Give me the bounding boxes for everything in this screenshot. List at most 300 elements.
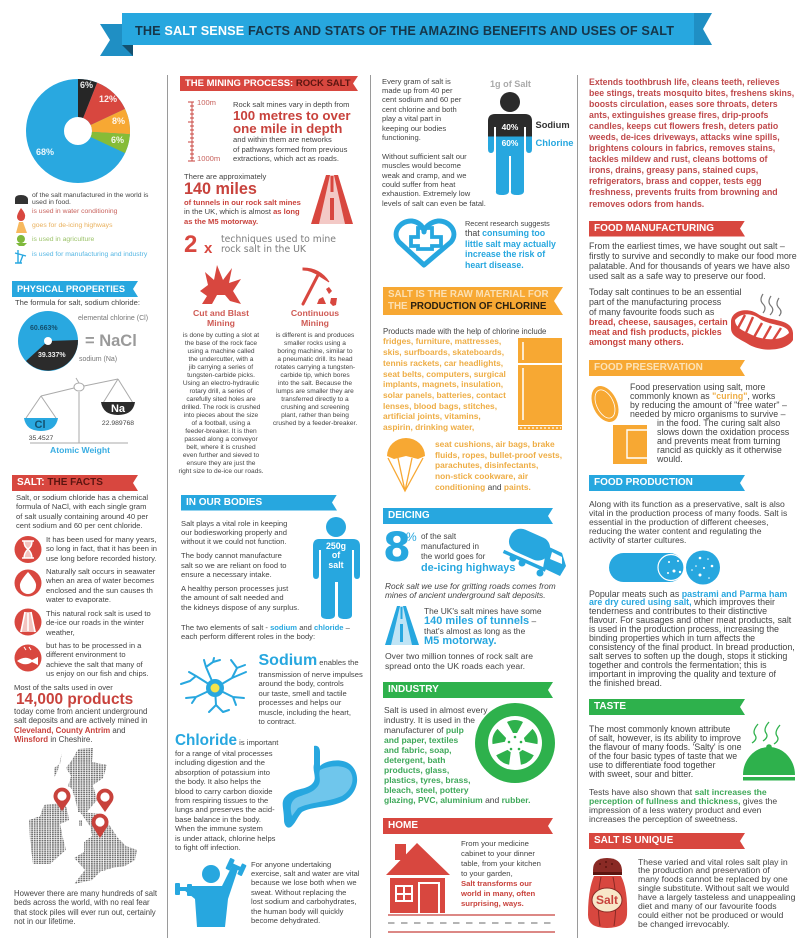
- text: mine depth: and within them are networks: [233, 135, 332, 144]
- text: cut and blast description: rotary drill, a series of: [189, 388, 253, 395]
- text: more chlorine products: parachutes, disinfectants,: [435, 460, 538, 470]
- text: industry uses: and fabric, soap,: [384, 745, 452, 755]
- text: fact list two: [46, 567, 156, 604]
- text: uk salt mines: The UK's salt mines have some: [424, 606, 542, 616]
- text: household uses: removes odors from hands.: [589, 199, 704, 209]
- text: 140 miles of tunnels: [184, 172, 301, 226]
- text: salt is unique: single substitute. Without salt we would: [638, 883, 789, 893]
- text: heart disease research: [465, 218, 565, 270]
- text: cut and blast description: ensure they are just the: [187, 460, 255, 467]
- text: meats: consistency of the final product. In bread production,: [589, 642, 795, 652]
- chart: sodium chloride composition pie: [18, 311, 78, 371]
- text: uk salt mines: M5 motorway.: [424, 635, 497, 647]
- heading: food preservation: FOOD PRESERVATION: [594, 362, 703, 373]
- text: exercise: because we lose both when we: [251, 878, 357, 887]
- text: household uses: candles, keeps cut flowers fresh, deters patio: [589, 121, 778, 131]
- text: salt is unique: [638, 858, 795, 929]
- illustration: atomic weight scale: 35.4527: [29, 435, 53, 442]
- text: fact list three: This natural rock salt is used to: [46, 609, 151, 618]
- text: bodies intro: [181, 518, 299, 612]
- text: sodium: around the body, controls: [258, 679, 344, 688]
- heading: salt is unique: SALT IS UNIQUE: [594, 835, 673, 846]
- text: heart disease research: increase the risk of: [465, 249, 545, 259]
- text: meats: the finished bread.: [589, 678, 662, 688]
- text: household uses: bee stings, treats mosquito bites, freshens skins,: [589, 88, 794, 98]
- text: continuous mining description: smaller rocks using a: [284, 340, 346, 347]
- legend: pie chart key: [14, 192, 148, 264]
- icon: road: [14, 608, 42, 636]
- icon: depth ruler: [188, 102, 195, 162]
- text: household uses: irons, drains, greasy pans, stained cups,: [589, 165, 758, 175]
- icon: stomach: [282, 746, 358, 828]
- text: salt is unique: the production and preservation of: [638, 865, 770, 875]
- text: chlorine products: fridges, furniture, mattresses,: [383, 336, 501, 346]
- text: food manufacturing: firstly to survive and secondly to make our food more: [589, 251, 797, 261]
- text: cut and blast description: carefully sited holes are: [186, 396, 256, 403]
- text: household uses: [589, 76, 794, 210]
- text: 140 miles of tunnels: 140 miles: [184, 180, 257, 198]
- text: food production: essential in the production of different cheeses,: [589, 516, 768, 526]
- text: 8 percent: of the salt: [421, 532, 456, 541]
- text: food manufacturing: of many favourite foods such as: [589, 307, 714, 317]
- text: fact list one: It has been used for many years,: [46, 535, 157, 544]
- text: continuous mining description: [273, 332, 357, 427]
- text: cut and blast description: is done by cutting a slot at: [183, 332, 259, 339]
- text: home: table, from your kitchen: [461, 859, 541, 868]
- text: industry uses: industry. It is used in the: [384, 715, 475, 725]
- text: fact list two: Naturally salt occurs in seawater: [46, 567, 155, 576]
- text: 1g of salt: 1g of Salt: [490, 79, 531, 89]
- text: home: to your garden,: [461, 869, 513, 878]
- heading: in our bodies: IN OUR BODIES: [186, 496, 262, 508]
- text: meats: together and controls the fermentation; this is: [589, 660, 767, 670]
- text: every gram: cent sodium and 60 per: [382, 95, 461, 104]
- text: taste: use to differentiate food together: [589, 760, 716, 770]
- text: more chlorine products: seat cushions, air bags, brake: [435, 439, 555, 449]
- text: salt beds closing: that stock piles will ever run out, certainly: [14, 908, 156, 917]
- text: home: From your medicine: [461, 839, 529, 848]
- chart: salt usage pie: 12%: [99, 94, 117, 104]
- heading: deicing: DEICING: [388, 510, 430, 521]
- text: chlorine products: solar panels, batteries, contact: [383, 390, 506, 400]
- chart: salt usage pie: 8%: [112, 116, 125, 126]
- text: bodies intro: our bodiesworking properly and: [181, 528, 287, 537]
- text: food manufacturing: part of the manufacturing process: [589, 297, 721, 307]
- text: food preservation: [630, 383, 810, 465]
- text: bodies intro: the kidneys dispose of any surplus.: [181, 603, 299, 612]
- text: more chlorine products: fluids, ropes, bullet-proof vests,: [435, 450, 562, 460]
- illustration: atomic weight scale: Atomic Weight: [50, 445, 110, 455]
- icon: weightlifter: [175, 858, 246, 927]
- text: exercise: become dehydrated.: [251, 916, 320, 925]
- icon: steak: [730, 293, 794, 351]
- text: household uses: freshness, prevents fruits from browning and: [589, 187, 778, 197]
- text: sodium label: sodium (Na): [79, 356, 117, 363]
- text: continuous mining description: boring machine, similar to: [277, 348, 353, 355]
- text: chloride: to fight off infection.: [175, 843, 241, 852]
- text: every gram: weak and cramp, and we: [382, 171, 466, 180]
- chart: salt usage pie: [26, 79, 130, 183]
- illustration: atomic weight scale: [24, 378, 135, 455]
- text: continuous mining description: is different is and produces: [276, 332, 354, 339]
- text: continuous mining description: lumps are smaller they are: [276, 388, 354, 395]
- heading: salt is unique: [589, 833, 745, 849]
- text: exercise: sweat. Without replacing the: [251, 888, 346, 897]
- icon: person with 250g of salt: [313, 517, 360, 619]
- text: cut and blast description: even further and sieved to: [183, 452, 259, 459]
- text: 140 miles of tunnels: as the M5 motorway.: [184, 217, 258, 226]
- icon: person with 250g of salt: salt: [328, 560, 344, 570]
- heading: physical properties: [12, 281, 138, 297]
- icon: serving cloche: [743, 722, 795, 782]
- text: fact list two: water to evaporate.: [46, 595, 111, 604]
- text: two million tonnes: spread onto the UK roads each year.: [385, 661, 525, 671]
- heading: food manufacturing: [589, 220, 745, 236]
- text: chloride: for a range of vital processes: [175, 749, 273, 758]
- text: two techniques: techniques used to mine: [221, 234, 336, 245]
- text: industry uses: detergent, bath: [384, 755, 445, 765]
- heading: continuous mining: Mining: [301, 318, 329, 328]
- icon: salt shaker: Salt: [596, 893, 618, 907]
- text: depth labels: 1000m: [197, 154, 220, 163]
- text: NaCl formula: = NaCl: [85, 332, 137, 350]
- text: more chlorine products: conditioning and paints.: [435, 482, 531, 492]
- heading: physical properties: PHYSICAL PROPERTIES: [17, 284, 125, 294]
- icon: pickaxe and rocks: [301, 268, 337, 306]
- text: industry uses: manufacturer of pulp: [384, 725, 464, 735]
- text: rock salt gritting: mines of ancient underground salt deposits.: [385, 590, 546, 600]
- text: 140 miles of tunnels: There are approximately: [184, 172, 266, 181]
- heading: raw material for chlorine: THE PRODUCTION OF CHLORINE: [388, 301, 546, 312]
- heading: salt the facts: [12, 475, 138, 491]
- text: heart disease research: that consuming too: [465, 228, 545, 238]
- heading: cut and blast mining: [193, 308, 249, 328]
- text: cut and blast description: drilled. The rock is crushed: [182, 404, 260, 411]
- heading: mining process: [180, 76, 358, 91]
- text: salt beds closing: However there are many hundreds of salt: [14, 889, 157, 898]
- text: meats: is used in the production process, increasing the: [589, 624, 779, 634]
- illustration: atomic weight scale: Cl: [34, 419, 46, 431]
- text: fact list one: use long before recorded history.: [46, 554, 156, 563]
- text: food preservation: slows down the oxidation process: [657, 427, 789, 437]
- chart: salt usage pie: 6%: [111, 135, 124, 145]
- text: two techniques: x: [204, 240, 212, 257]
- heading: industry: [383, 682, 553, 698]
- icon: neuron: [180, 657, 247, 713]
- text: chloride: blood to carry carbon dioxide: [175, 787, 273, 796]
- heading: in our bodies: [181, 494, 337, 510]
- text: chloride: from respiring tissues to the: [175, 796, 268, 805]
- text: household uses: ants, extinguishes grease fires, drip-proofs: [589, 110, 768, 120]
- text: home: Salt transforms our: [461, 879, 532, 888]
- text: 14,000 products: Winsford in Cheshire.: [14, 735, 92, 744]
- map: UK salt mines: [29, 748, 137, 884]
- text: chloride: absorption of potassium into: [175, 768, 270, 777]
- text: food manufacturing: [589, 241, 797, 347]
- icon: parachute: [387, 438, 425, 493]
- legend: pie chart key: goes for de-icing highways: [32, 222, 112, 229]
- text: fact list one: so long in fact, that it has been in: [46, 544, 157, 553]
- chart: sodium chloride composition pie: 60.663%: [30, 325, 58, 332]
- heading: deicing: [383, 508, 553, 524]
- text: every gram: functioning. Without sufficient salt our: [382, 133, 467, 161]
- text: chlorine products: skis, surfboards, skateboards,: [383, 347, 504, 357]
- text: two million tonnes: Over two million tonnes of rock salt are: [385, 651, 533, 661]
- text: food production: Along with its function as a preservative, salt is also: [589, 498, 785, 508]
- text: fact list three: de-ice our roads in the winter: [46, 618, 144, 627]
- text: chloride: When the immune system: [175, 824, 263, 833]
- text: chloride: is under attack, chlorine helps: [175, 834, 275, 843]
- title banner: [100, 13, 712, 56]
- text: salt is unique: These varied and vital roles salt play in: [638, 856, 788, 866]
- icon: hourglass: [14, 536, 42, 563]
- text: continuous mining description: rotates carrying a tungsten-: [275, 364, 355, 371]
- text: home: surprising, ways.: [461, 899, 524, 908]
- text: taste: impression of a less watery product and even: [589, 804, 761, 814]
- text: every gram: could suffer from heat: [382, 180, 455, 189]
- text: industry uses: [384, 705, 530, 805]
- text: bodies intro: salt so we are reliant on food to: [181, 561, 287, 570]
- heading: continuous mining: [291, 308, 339, 328]
- legend: pie chart key: used in food.: [32, 199, 71, 206]
- text: household uses: tackles mildew and rust, cleans bottoms of: [589, 154, 767, 164]
- text: cut and blast description: right size to de-ice our roads.: [178, 468, 264, 475]
- text: sodium: processes and helps our: [258, 698, 341, 707]
- text: taste: [589, 724, 777, 824]
- text: every gram: exhaustion. Extremely low: [382, 189, 470, 198]
- icon: explosion: [200, 265, 241, 304]
- text: fact list four: different environment to: [46, 650, 126, 659]
- legend: pie chart key: is used in agriculture: [32, 236, 94, 243]
- text: chlorine products: [383, 326, 513, 433]
- illustration: road lines: [388, 914, 556, 934]
- text: 14,000 products: [14, 683, 147, 744]
- text: exercise: the human body will quickly: [251, 907, 343, 916]
- text: two elements: [181, 623, 350, 641]
- text: taste: The most commonly known attribute: [589, 724, 730, 734]
- text: food manufacturing: bread, cheese, sausages, certain: [589, 317, 728, 327]
- text: sodium: to contract.: [258, 717, 296, 726]
- text: salt intro: [16, 493, 148, 530]
- legend: pie chart key: is used for manufacturing and industry: [32, 251, 147, 258]
- text: fact list four: us enjoy on our fish and chips.: [46, 669, 149, 678]
- text: chlorine products: implants, magnets, insulation,: [383, 379, 503, 389]
- text: chlorine products: aspirin, drinking water,: [383, 422, 474, 432]
- text: food manufacturing: palatable. And for thousands of years we have also: [589, 261, 790, 271]
- text: industry uses: Salt is used in almost every: [384, 705, 487, 715]
- text: chloride: the body. It also helps the: [175, 777, 261, 786]
- icon: salt shaker: [588, 857, 627, 928]
- text: food preservation: needed by micro organisms to survive –: [630, 409, 785, 419]
- text: 14,000 products: today come from ancient underground: [14, 707, 147, 716]
- text: food preservation: in the food. The curing salt also: [657, 418, 780, 428]
- text: every gram: keeping our bodies: [382, 124, 446, 133]
- text: chlorine products: seat belts, computers, surgical: [383, 369, 506, 379]
- heading: home: HOME: [388, 820, 418, 831]
- text: every gram: play a vital part in: [382, 114, 441, 123]
- illustration: atomic weight scale: 22.989768: [102, 420, 134, 427]
- text: heart disease research: little salt may actually: [465, 238, 556, 248]
- text: two elements: each perform different roles in the body:: [181, 632, 315, 641]
- text: 14,000 products: Cleveland, County Antrim and: [14, 726, 126, 735]
- title banner: THE SALT SENSE FACTS AND STATS OF THE AMAZING BENEFITS AND USES OF SALT: [135, 24, 674, 38]
- heading: cut and blast mining: Mining: [207, 318, 235, 328]
- icon: road: [311, 175, 353, 224]
- text: taste: increases the perception of sweetness.: [589, 814, 738, 824]
- text: chloride: [175, 732, 278, 852]
- text: meats: [589, 590, 795, 688]
- text: every gram: levels of salt can even be fatal.: [382, 199, 486, 208]
- text: bodies intro: ensure a necessary intake. A healthy person processes just: [181, 570, 288, 593]
- icon: blue road: [385, 606, 419, 646]
- text: food preservation: rancid as quickly as it otherwise: [657, 445, 782, 455]
- text: food production: activity of starter cultures.: [589, 534, 686, 544]
- text: every gram: [382, 76, 486, 208]
- text: meats: salt serves to soften up the dough, stops it sticking: [589, 651, 787, 661]
- text: two techniques: 2: [184, 231, 197, 258]
- icon: preserving can: [590, 386, 648, 465]
- text: heart disease research: Recent research suggests: [465, 218, 550, 228]
- text: continuous mining description: a pneumatic drill. Its head: [277, 356, 353, 363]
- text: uk salt mines: that's almost as long as the: [424, 626, 525, 636]
- icon: wheel: [475, 703, 555, 783]
- text: two techniques: [184, 231, 336, 258]
- text: taste: of salt, however, is its ability to improve: [589, 732, 741, 742]
- text: cut and blast description: feeder-breaker. It is then: [185, 428, 257, 435]
- heading: raw material for chlorine: [383, 287, 563, 315]
- chart: salt usage pie: 68%: [36, 147, 54, 157]
- text: exercise: For anyone undertaking: [251, 860, 331, 868]
- text: sodium: Sodium enables the: [258, 652, 359, 669]
- icon: person with 250g of salt: of: [332, 550, 340, 560]
- text: home: cabinet to your dinner: [461, 849, 535, 858]
- text: fact list one: [46, 535, 157, 563]
- text: household uses: Extends toothbrush life, cleans teeth, relieves: [589, 76, 780, 86]
- text: food preservation: commonly known as "curing", works: [630, 391, 775, 401]
- text: chloride: base balance in the body.: [175, 815, 261, 824]
- text: industry uses: plastics, tyres, brass,: [384, 775, 470, 785]
- text: food preservation: and prevents meat from turning: [657, 436, 780, 446]
- text: sodium: muscle, including the heart,: [258, 708, 351, 717]
- text: chlorine products: artificial joints, vitamins,: [383, 411, 481, 421]
- text: cut and blast description: using a machine called: [187, 348, 255, 355]
- text: bodies intro: the amount of salt needed and: [181, 593, 284, 602]
- text: food production: vital in the production process of many foods. Salt is: [589, 508, 787, 518]
- text: depth labels: 100m: [197, 98, 216, 107]
- text: cut and blast description: the undercutter, with a: [189, 356, 253, 363]
- text: two elements: The two elements of salt - sodium and chloride –: [181, 623, 350, 632]
- text: fact list three: weather,: [46, 628, 75, 637]
- text: mine depth: extractions, which act as roads.: [233, 154, 339, 163]
- text: industry uses: products, glass,: [384, 765, 449, 775]
- text: food preservation: by reducing the amount of "free water" –: [630, 400, 787, 410]
- text: salt is unique: many foods cannot be replaced by one: [638, 874, 788, 884]
- text: fact list four: but has to be processed in a: [46, 641, 141, 650]
- text: more chlorine products: [435, 439, 562, 493]
- text: rock salt gritting: [385, 582, 556, 600]
- text: food manufacturing: From the earliest times, we have sought out salt –: [589, 241, 785, 251]
- text: every gram: made up from 40 per: [382, 86, 452, 95]
- text: home: [461, 839, 541, 909]
- heading: taste: TASTE: [594, 701, 626, 712]
- text: cut and blast description: passed along a conveyor: [184, 436, 258, 443]
- text: 8 percent: [383, 528, 513, 574]
- text: 14,000 products: Most of the salts used in over: [14, 683, 113, 692]
- text: salt is unique: have a largely tasteless and unappealing: [638, 892, 795, 902]
- text: continuous mining description: plant, rather than being: [281, 412, 349, 419]
- heading: industry: INDUSTRY: [388, 684, 439, 695]
- text: salt intro: formula of NaCl, with each single gram: [16, 502, 146, 511]
- text: cut and blast description: jib carrying a series of: [189, 364, 253, 371]
- icon: person 40/60 split: 40%: [502, 122, 519, 132]
- text: food manufacturing: amongst many others.: [589, 337, 684, 347]
- text: exercise: [251, 860, 359, 925]
- text: sodium: [258, 652, 363, 726]
- text: chloride: Chloride is important: [175, 732, 278, 749]
- text: salt beds closing: beds across the world, with no real fear: [14, 898, 150, 907]
- text: every gram: muscles would become: [382, 161, 461, 170]
- text: food preservation: would.: [657, 454, 683, 464]
- text: salt is unique: diet and many of our favourite foods: [638, 901, 777, 911]
- text: exercise: lost sodium and carbohydrates,: [251, 897, 357, 906]
- icon: fridge: [518, 338, 563, 431]
- text: uk salt mines: [424, 606, 542, 647]
- text: every gram: cent chlorine and both: [382, 105, 457, 114]
- text: 8 percent: manufactured in: [421, 542, 479, 551]
- text: household uses: brightens colours in fabrics, removes stains,: [589, 143, 775, 153]
- text: salt intro: cent sodium and 60 per cent chloride.: [16, 521, 143, 530]
- text: mine depth: 100 metres to over: [233, 108, 351, 123]
- text: meats: flavour. For sausages and other meat products, salt: [589, 615, 791, 625]
- text: chlorine products: Products made with the help of chlorine include: [383, 326, 546, 336]
- chart: salt usage pie: 6%: [80, 80, 93, 90]
- text: bodies intro: without it we could not function. The body cannot manufacture: [181, 537, 287, 560]
- text: food production: reducing the water content and regulating the: [589, 526, 761, 536]
- text: fact list two: enclosed and the sun causes th: [46, 586, 153, 595]
- text: mine depth: [233, 100, 351, 163]
- heading: mining process: THE MINING PROCESS: ROCK SALT: [185, 78, 351, 89]
- text: household uses: weeds, de-ices driveways, attacks wine spills,: [589, 132, 780, 142]
- icon: sausage and slice: [609, 551, 721, 586]
- icon: person 40/60 split: [488, 92, 532, 195]
- text: sodium: our taste, smell and tactile: [258, 689, 347, 698]
- text: continuous mining description: carbide tip, which bores: [280, 372, 350, 379]
- heading: food production: FOOD PRODUCTION: [594, 477, 693, 488]
- text: mine depth: Rock salt mines vary in depth from: [233, 100, 349, 108]
- text: 8 percent: 8: [383, 525, 411, 571]
- chart: sodium chloride composition pie: 39.337%: [38, 352, 66, 359]
- text: 8 percent: the world goes for: [421, 552, 485, 561]
- text: salt is unique: could either not be produced or would: [638, 910, 783, 920]
- text: formula intro: The formula for salt, sodium chloride:: [15, 298, 140, 307]
- text: elemental chlorine label: elemental chlorine (Cl): [78, 315, 148, 322]
- text: meats: Popular meats such as pastrami and Parma ham: [589, 588, 787, 598]
- text: salt beds closing: [14, 889, 157, 926]
- text: two techniques: rock salt in the UK: [221, 244, 306, 255]
- text: rock salt gritting: Rock salt we use for gritting roads comes from: [385, 580, 556, 590]
- text: salt intro: of salt usually containing around 40 per: [16, 512, 148, 521]
- text: heart disease research: heart disease.: [465, 260, 524, 270]
- icon: gritting truck: [508, 530, 566, 578]
- text: 14,000 products: salt deposits and are actively mined in: [14, 716, 147, 725]
- text: salt beds closing: not in our lifetime.: [14, 917, 76, 926]
- text: sodium share label: Sodium: [536, 120, 570, 130]
- heading: raw material for chlorine: SALT IS THE RAW MATERIAL FOR: [388, 289, 549, 300]
- text: uk salt mines: 140 miles of tunnels –: [424, 615, 536, 627]
- text: depth labels: [197, 98, 220, 163]
- icon: water drop: [14, 570, 42, 596]
- text: chloride: including digestion and the: [175, 758, 265, 767]
